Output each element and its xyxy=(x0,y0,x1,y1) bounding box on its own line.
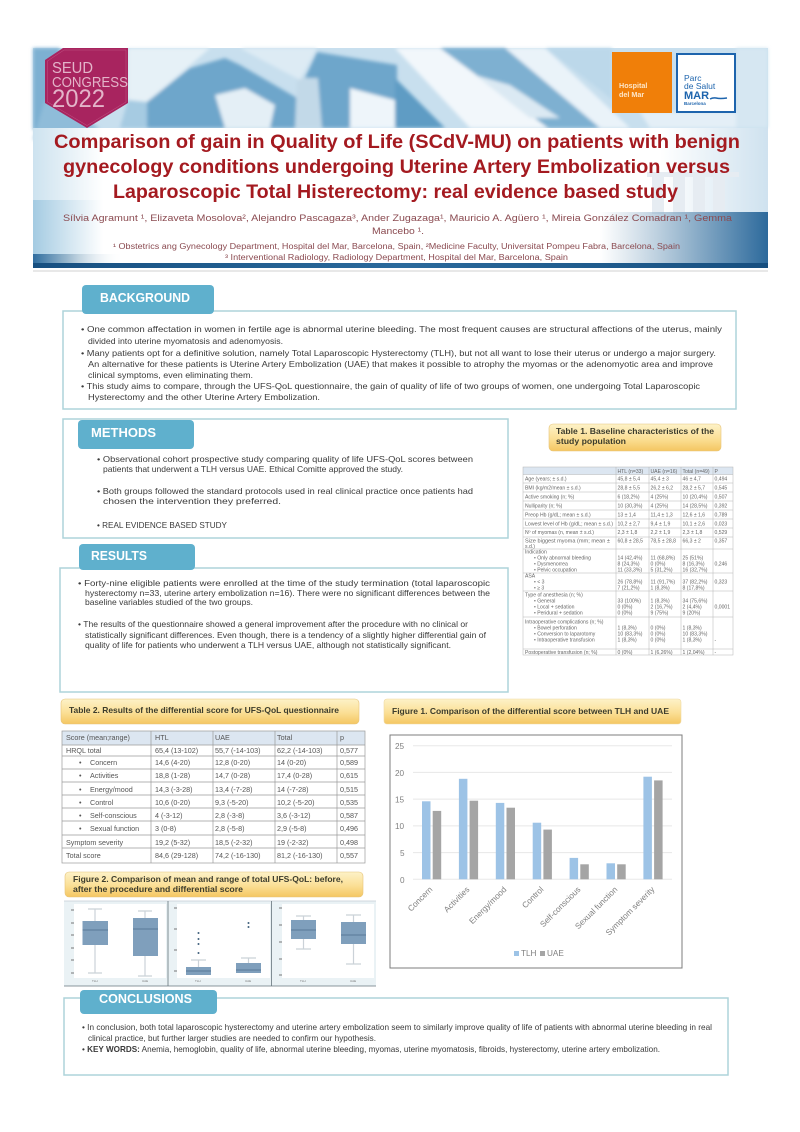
table 1: baseline characteristics: 45,4 ± 3 xyxy=(650,476,669,482)
background text: • This study aims to compare, through the UFS-QoL questionnaire, the gain of quality of life of two groups of women, one undergoing Total Laparoscopic xyxy=(81,381,700,391)
logo: SEUD Congress 2022 xyxy=(45,48,128,128)
table 2: differential score: 18,5 (-2-32) xyxy=(215,838,253,847)
table 1: baseline characteristics: 5 (31,2%) xyxy=(650,568,673,574)
box plot: after procedure xyxy=(168,901,272,986)
table 1: baseline characteristics: 1 (8,3%) xyxy=(650,598,670,604)
box plot: before procedure: UAE xyxy=(142,979,148,983)
conclusions text: • In conclusion, both total laparoscopic hysterectomy and uterine artery embolization seem to similarly improve quality of life of patients with abnormal uterine bleeding in real xyxy=(82,1022,712,1032)
category labels: Concern xyxy=(406,885,435,913)
temple silhouette xyxy=(647,172,739,214)
table 2: differential score: 0,587 xyxy=(340,811,358,820)
table 1: baseline characteristics: 1 (8,3%) xyxy=(682,638,702,644)
heading: results: RESULTS xyxy=(91,549,147,563)
table 1: baseline characteristics: 0 (0%) xyxy=(650,562,666,568)
table 1: baseline characteristics: 14 (28,5%) xyxy=(682,504,708,510)
title: Comparison of gain in Quality of Life (SCdV-MU) on patients with benign xyxy=(54,131,740,153)
table 1: baseline characteristics: • General xyxy=(534,598,555,604)
table 1: baseline characteristics: 0,357 xyxy=(714,538,727,544)
box plot: differential score xyxy=(279,904,374,983)
table 2: differential score: 17,4 (0-28) xyxy=(277,771,312,780)
table 1: baseline characteristics: Type of anesthesia (n; %) xyxy=(525,592,583,598)
callout: table 2 title: Table 2. Results of the differential score for UFS-QoL questionnaire xyxy=(69,705,339,715)
table 1: baseline characteristics: Indication xyxy=(525,550,547,556)
table 1: baseline characteristics: - xyxy=(714,650,716,656)
results text xyxy=(78,578,490,650)
table 2: differential score: 2,8 (-3-8) xyxy=(215,811,245,820)
table 1: baseline characteristics: 10,2 ± 2,7 xyxy=(618,522,640,528)
table 1: baseline characteristics: P xyxy=(714,469,718,475)
table 1: baseline characteristics: 11 (68,8%) xyxy=(650,556,675,562)
table 1: baseline characteristics: 10 (83,3%) xyxy=(618,632,643,638)
box plot: differential score: UAE xyxy=(350,979,356,983)
table 1: baseline characteristics: s.d.) xyxy=(525,544,535,550)
table 2: differential score: 2,9 (-5-8) xyxy=(277,824,307,833)
callout: table 1 title: study population xyxy=(556,436,626,446)
table 1: baseline characteristics: 2 (16,7%) xyxy=(650,604,673,610)
callout: figure 1 title: Figure 1. Comparison of the differential score between TLH and UAE xyxy=(392,706,669,716)
table 1: baseline characteristics: 45,8 ± 5,4 xyxy=(618,476,640,482)
table 1: baseline characteristics: 26 (78,8%) xyxy=(618,580,643,586)
table 1: baseline characteristics: BMI (kg/m2/mean ± s.d.) xyxy=(525,486,581,492)
logo: Parc de Salut Mar: de Salut xyxy=(684,81,716,91)
table 1: baseline characteristics: • ≥ 3 xyxy=(534,586,544,592)
y axis labels: 5 xyxy=(400,849,405,858)
table 1: baseline characteristics: • Local + sedation xyxy=(534,604,575,610)
table 2: differential score: • xyxy=(79,811,82,820)
logo: SEUD Congress 2022: SEUD xyxy=(52,60,93,77)
header banner xyxy=(33,48,768,268)
category labels: Self-conscious xyxy=(538,885,582,929)
table 2: differential score: Score (mean;range) xyxy=(66,733,130,742)
panel: conclusions xyxy=(64,990,728,1075)
table 2: differential score: 0,557 xyxy=(340,851,358,860)
table 2: differential score: 9,3 (-5-20) xyxy=(215,798,249,807)
table 1: baseline characteristics: 10 (20,4%) xyxy=(682,494,708,500)
box plot: before procedure xyxy=(71,904,166,983)
callout: table 1 title xyxy=(549,424,721,451)
table 2: differential score: 14,7 (0-28) xyxy=(215,771,250,780)
table 1: baseline characteristics: 0 (0%) xyxy=(618,604,633,610)
table 2: differential score: 18,8 (1-28) xyxy=(155,771,190,780)
table 1: baseline characteristics: 0,529 xyxy=(714,530,727,536)
methods text: • Observational cohort prospective study comparing quality of life UFS-QoL scores between xyxy=(97,454,473,464)
logo: Hospital del Mar xyxy=(612,52,672,113)
table 2: differential score: 14 (-7-28) xyxy=(277,785,309,794)
table 1: baseline characteristics: 11 (91,7%) xyxy=(650,580,675,586)
y axis labels: 0 xyxy=(400,876,405,885)
figure 2: box plots xyxy=(64,901,376,986)
background text: clinical symptoms, even eliminating them. xyxy=(88,370,253,380)
table 1: baseline characteristics: • Peridural + sedation xyxy=(534,610,583,616)
table 2: differential score: Activities xyxy=(90,771,119,780)
table 1: baseline characteristics: • Conversion to laparotomy xyxy=(534,632,596,638)
table 1: baseline characteristics: 1 (8,3%) xyxy=(618,626,637,632)
table 2: differential score: 0,496 xyxy=(340,824,358,833)
heading: conclusions xyxy=(80,990,217,1014)
table 2: differential score: 0,535 xyxy=(340,798,358,807)
table 1: baseline characteristics: HTL (n=33) xyxy=(618,469,644,475)
table 2: differential score: 13,4 (-7-28) xyxy=(215,785,253,794)
category labels xyxy=(406,884,657,937)
table 2: differential score: Self-conscious xyxy=(90,811,137,820)
table 1: baseline characteristics: 13 ± 1,4 xyxy=(618,512,636,518)
table 2: differential score: 74,2 (-16-130) xyxy=(215,851,261,860)
panel: methods xyxy=(63,419,508,538)
legend: TLH xyxy=(521,949,537,958)
authors: Sílvia Agramunt ¹, Elizaveta Mosolova², Alejandro Pascagaza³, Ander Zugazaga¹, Mauricio A. Agüero ¹, Mireia González Comadran ¹, Gemma xyxy=(63,213,733,224)
table 1: baseline characteristics: 1 (8,3%) xyxy=(650,586,670,592)
box plot: after procedure: TLH xyxy=(195,979,201,983)
table 2: differential score: Concern xyxy=(90,758,117,767)
table 2: differential score: 81,2 (-16-130) xyxy=(277,851,323,860)
box plot: after procedure: UAE xyxy=(245,979,251,983)
table 1: baseline characteristics: • < 3 xyxy=(534,580,545,586)
table 1: baseline characteristics: 11,4 ± 1,3 xyxy=(650,512,673,518)
table 1: baseline characteristics: 2,3 ± 1,8 xyxy=(618,530,637,536)
callout: figure 2 title xyxy=(65,872,363,897)
table 2: differential score: 55,7 (-14-103) xyxy=(215,746,261,755)
heading: background: BACKGROUND xyxy=(100,291,190,305)
table 1: baseline characteristics: 0 (0%) xyxy=(618,610,633,616)
table 1: baseline characteristics: 16 (32,7%) xyxy=(682,568,708,574)
table 1: baseline characteristics: UAE (n=16) xyxy=(650,469,678,475)
table 1: baseline characteristics: • Only abnormal bleeding xyxy=(534,556,591,562)
table 1: baseline characteristics: Nulliparity (n; %) xyxy=(525,504,563,510)
table 1: baseline characteristics: 4 (25%) xyxy=(650,494,669,500)
title: Laparoscopic Total Histerectomy: real evidence based study xyxy=(113,181,678,203)
table 2: differential score: 0,577 xyxy=(340,746,358,755)
table 1: baseline characteristics: 0,023 xyxy=(714,522,727,528)
table 1: baseline characteristics: 2 (4,4%) xyxy=(682,604,702,610)
bars: TLH xyxy=(422,777,652,879)
y axis labels: 20 xyxy=(395,769,405,778)
table 1: baseline characteristics: 46 ± 4,7 xyxy=(682,476,701,482)
table 2: differential score: 0,498 xyxy=(340,838,358,847)
table 1: baseline characteristics: 0,545 xyxy=(714,486,727,492)
table 1: baseline characteristics: Size biggest myoma (mm; mean ± xyxy=(525,538,610,544)
title: gynecology conditions undergoing Uterine Artery Embolization versus xyxy=(63,156,730,178)
table 1: baseline characteristics: 0,246 xyxy=(714,562,727,568)
table 1: baseline characteristics: 1 (8,3%) xyxy=(682,626,702,632)
table 2: differential score: 10,6 (0-20) xyxy=(155,798,190,807)
legend xyxy=(514,949,564,958)
logo: SEUD Congress 2022: CONGRESS xyxy=(52,74,128,91)
table 1: baseline characteristics: 28,8 ± 5,5 xyxy=(618,486,640,492)
table 2: differential score: 10,2 (-5-20) xyxy=(277,798,315,807)
conclusions text: • KEY WORDS: Anemia, hemoglobin, quality of life, abnormal uterine bleeding, myomas, uterine myomatosis, fibroids, hysterectomy, uterine artery embolization. xyxy=(82,1044,660,1054)
table 2: differential score: 4 (-3-12) xyxy=(155,811,183,820)
table 2: differential score: HRQL total xyxy=(66,746,102,755)
figure 1: bar chart xyxy=(390,735,682,968)
table 1: baseline characteristics: 0,507 xyxy=(714,494,727,500)
y axis labels: 10 xyxy=(395,822,405,831)
table 1: baseline characteristics: 0 (0%) xyxy=(650,626,666,632)
background text: divided into uterine myomatosis and adenomyosis. xyxy=(88,336,283,346)
conclusions text: clinical practice, but further larger studies are needed to confirm our hypothesis. xyxy=(88,1033,376,1043)
logo: Hospital del Mar: del Mar xyxy=(619,90,644,99)
y axis labels xyxy=(395,742,405,885)
table 2: differential score: 2,8 (-5-8) xyxy=(215,824,245,833)
table 1: baseline characteristics: 8 (16,3%) xyxy=(682,562,705,568)
panel: results xyxy=(60,544,508,692)
background text: • Many patients opt for a definitive solution, namely Total Laparoscopic Hysterectomy (TLH), but not all want to lose their uterus or undergo a major surgery. xyxy=(81,348,716,358)
authors: Mancebo ¹. xyxy=(372,226,424,237)
table 1: baseline characteristics: • Intraoperative transfusion xyxy=(534,638,595,644)
callout: figure 1 title xyxy=(384,699,681,724)
table 2: differential score: Control xyxy=(90,798,114,807)
table 2: differential score: p xyxy=(340,733,344,742)
table 1: baseline characteristics: 0,392 xyxy=(714,504,727,510)
category labels: Activities xyxy=(442,885,471,914)
callout: table 1 title: Table 1. Baseline characteristics of the xyxy=(556,426,714,436)
box plot: before procedure: TLH xyxy=(92,979,98,983)
table 1: baseline characteristics: 0,323 xyxy=(714,580,727,586)
table 2: differential score: • xyxy=(79,798,82,807)
table 1: baseline characteristics: 9 (75%) xyxy=(650,610,669,616)
y axis labels: 15 xyxy=(395,796,405,804)
table 1: baseline characteristics: 0 (0%) xyxy=(618,650,633,656)
affiliations: ¹ Obstetrics ang Gynecology Department, Hospital del Mar, Barcelona, Spain, ²Medicine Faculty, Universitat Pompeu Fabra, Barcelona, Spain xyxy=(113,242,680,251)
methods text: • REAL EVIDENCE BASED STUDY xyxy=(97,520,227,530)
table 1: baseline characteristics: 9,4 ± 1,9 xyxy=(650,522,670,528)
table 1: baseline characteristics: 7 (21,2%) xyxy=(618,586,640,592)
table 1: baseline characteristics: 34 (75,6%) xyxy=(682,598,708,604)
category labels: Energy/mood xyxy=(468,885,509,926)
table 1: baseline characteristics: Active smoking (n; %) xyxy=(525,494,575,500)
table 2: differential score: • xyxy=(79,758,82,767)
table 1: baseline characteristics: 6 (18,2%) xyxy=(618,494,640,500)
callout: figure 2 title: after the procedure and differential score xyxy=(73,884,243,894)
table 1: baseline characteristics: Postoperative transfusion (n; %) xyxy=(525,650,598,656)
heading: results xyxy=(79,544,195,570)
table 2: differential score: Symptom severity xyxy=(66,838,124,847)
background text: • One common affectation in women in fertile age is abnormal uterine bleeding. The most frequent causes are structural affections of the uterus, mainly xyxy=(81,324,723,334)
background text xyxy=(81,324,723,402)
table 1: baseline characteristics: Intraoperative complications (n; %) xyxy=(525,620,604,626)
table 1: baseline characteristics: - xyxy=(714,638,716,644)
results text: hysterectomy n=33, uterine artery embolization n=16). There were no significant differences between the xyxy=(85,588,490,598)
table 1: baseline characteristics xyxy=(523,467,733,656)
table 2: differential score: 14,6 (4-20) xyxy=(155,758,190,767)
table 1: baseline characteristics: 26,2 ± 6,2 xyxy=(650,486,673,492)
table 1: baseline characteristics: 2,3 ± 1,8 xyxy=(682,530,702,536)
table 2: differential score: 19 (-2-32) xyxy=(277,838,309,847)
legend: UAE xyxy=(547,949,564,958)
table 2: differential score: HTL xyxy=(155,733,169,742)
table 1: baseline characteristics: 14 (42,4%) xyxy=(618,556,643,562)
table 1: baseline characteristics: Lowest level of Hb (g/dL; mean ± s.d.) xyxy=(525,522,613,528)
table 2: differential score: 0,515 xyxy=(340,785,358,794)
table 1: baseline characteristics: 0,494 xyxy=(714,476,727,482)
background text: An alternative for these patients is Uterine Artery Embolization (UAE) that makes it possible to atrophy the myomas or the adenomyotic area and improve xyxy=(88,359,713,369)
table 1: baseline characteristics: 0 (0%) xyxy=(650,632,666,638)
callout: figure 2 title: Figure 2. Comparison of mean and range of total UFS-QoL: before, xyxy=(73,874,343,884)
callout: table 2 title xyxy=(61,699,359,724)
methods text: chosen the intervention they preferred. xyxy=(103,496,281,506)
table 2: differential score: Sexual function xyxy=(90,824,139,833)
table 1: baseline characteristics: 0,789 xyxy=(714,512,727,518)
table 1: baseline characteristics: • Dysmenorrea xyxy=(534,562,568,568)
affiliations xyxy=(113,242,680,262)
table 1: baseline characteristics: 10 (30,3%) xyxy=(618,504,643,510)
logo: Parc de Salut Mar: Parc xyxy=(684,73,702,83)
heading: methods xyxy=(78,420,194,449)
table 1: baseline characteristics: Age (years; ± s.d.) xyxy=(525,476,567,482)
table 2: differential score: 0,589 xyxy=(340,758,358,767)
table 1: baseline characteristics: 25 (51%) xyxy=(682,556,703,562)
category labels: Sexual function xyxy=(573,885,620,931)
table 2: differential score: 3 (0-8) xyxy=(155,824,176,833)
table 1: baseline characteristics: 66,3 ± 2 xyxy=(682,538,701,544)
table 1: baseline characteristics: 1 (2,04%) xyxy=(682,650,705,656)
table 1: baseline characteristics: Preop Hb (g/dL; mean ± s.d.) xyxy=(525,512,591,518)
heading: conclusions: CONCLUSIONS xyxy=(99,992,192,1006)
table 1: baseline characteristics: Total (n=49) xyxy=(682,469,710,475)
table 1: baseline characteristics: 37 (82,2%) xyxy=(682,580,708,586)
logo: Parc de Salut Mar: Barcelona xyxy=(684,101,706,106)
logo: SEUD Congress 2022: 2022 xyxy=(52,85,105,113)
table 1: baseline characteristics: 33 (100%) xyxy=(618,598,641,604)
table 2: differential score: Total xyxy=(277,733,293,742)
box plot: differential score: TLH xyxy=(300,979,306,983)
table 1: baseline characteristics: 8 (24,3%) xyxy=(618,562,640,568)
table 1: baseline characteristics: Nº of myomas (n, mean ± s.d.) xyxy=(525,530,594,536)
panel: background xyxy=(63,285,736,409)
table 2: differential score: 65,4 (13-102) xyxy=(155,746,198,755)
table 1: baseline characteristics: 28,2 ± 5,7 xyxy=(682,486,705,492)
category labels: Control xyxy=(520,885,546,910)
table 1: baseline characteristics: 10 (83,3%) xyxy=(682,632,708,638)
table 2: differential score: 14 (0-20) xyxy=(277,758,306,767)
results text: • Forty-nine eligible patients were enrolled at the time of the study termination (total laparoscopic xyxy=(78,578,490,588)
table 1: baseline characteristics: 1 (8,3%) xyxy=(618,638,637,644)
table 2: differential score: Energy/mood xyxy=(90,785,133,794)
results text: statistically significant differences. Even though, there is a tendency of a slightly higher differential gain of xyxy=(85,630,487,640)
title xyxy=(54,131,740,203)
table 1: baseline characteristics: 2,2 ± 1,9 xyxy=(650,530,670,536)
table 2: differential score: • xyxy=(79,824,82,833)
affiliations: ³ Interventional Radiology, Radiology Department, Hospital del Mar, Barcelona, Spain xyxy=(225,253,568,262)
table 1: baseline characteristics: 11 (33,3%) xyxy=(618,568,642,574)
table 2: differential score: 19,2 (5-32) xyxy=(155,838,190,847)
methods text xyxy=(97,454,473,530)
table 1: baseline characteristics: 1 (6,26%) xyxy=(650,650,673,656)
table 2: differential score: 14,3 (-3-28) xyxy=(155,785,193,794)
table 2: differential score: 12,8 (0-20) xyxy=(215,758,250,767)
table 1: baseline characteristics: 4 (25%) xyxy=(650,504,669,510)
table 2: differential score: 0,615 xyxy=(340,771,358,780)
logo: Parc de Salut Mar: MAR xyxy=(684,90,709,102)
table 1: baseline characteristics: 12,6 ± 1,6 xyxy=(682,512,705,518)
table 1: baseline characteristics: 60,8 ± 28,5 xyxy=(618,538,643,544)
y axis labels: 25 xyxy=(395,742,405,751)
logo: Hospital del Mar: Hospital xyxy=(619,81,647,90)
table 2: differential score: UAE xyxy=(215,733,230,742)
methods text: • Both groups followed the standard protocols used in real clinical practice once patients had xyxy=(97,486,473,496)
heading: methods: METHODS xyxy=(91,426,156,440)
logo: Parc de Salut Mar xyxy=(677,54,735,112)
table 1: baseline characteristics: 78,5 ± 28,8 xyxy=(650,538,676,544)
background text: Hysterectomy and the other Uterine Artery Embolization. xyxy=(88,392,320,402)
results text: • The results of the questionnaire showed a general improvement after the procedure with no clinical or xyxy=(78,619,468,629)
bars: UAE xyxy=(433,780,663,879)
table 1: baseline characteristics: 10,1 ± 2,6 xyxy=(682,522,705,528)
results text: quality of life for patients who underwent a TLH versus UAE, although not statistically significant. xyxy=(85,640,451,650)
table 1: baseline characteristics: • Bowel perforation xyxy=(534,626,577,632)
table 2: differential score: 84,6 (29-128) xyxy=(155,851,198,860)
table 1: baseline characteristics: 0 (0%) xyxy=(650,638,666,644)
category labels: Symptom severity xyxy=(604,884,657,937)
table 2: differential score: • xyxy=(79,771,82,780)
table 2: differential score: 62,2 (-14-103) xyxy=(277,746,323,755)
table 1: baseline characteristics: 0,0001 xyxy=(714,604,730,610)
authors xyxy=(63,213,733,237)
table 2: differential score: Total score xyxy=(66,851,101,860)
table 1: baseline characteristics: 8 (17,8%) xyxy=(682,586,705,592)
conclusions text xyxy=(82,1022,712,1054)
table 2: differential score: • xyxy=(79,785,82,794)
heading: background xyxy=(82,285,214,314)
results text: baseline variables studied of the two groups. xyxy=(85,597,253,607)
table 1: baseline characteristics: 9 (20%) xyxy=(682,610,701,616)
table 2: differential score: 3,6 (-3-12) xyxy=(277,811,311,820)
table 1: baseline characteristics: • Pelvic occupation xyxy=(534,568,577,574)
table 2: differential score xyxy=(62,731,365,863)
table 1: baseline characteristics: ASA xyxy=(525,574,536,580)
methods text: patients that underwent a TLH versus UAE. Ethical Comitte approved the study. xyxy=(103,464,403,474)
